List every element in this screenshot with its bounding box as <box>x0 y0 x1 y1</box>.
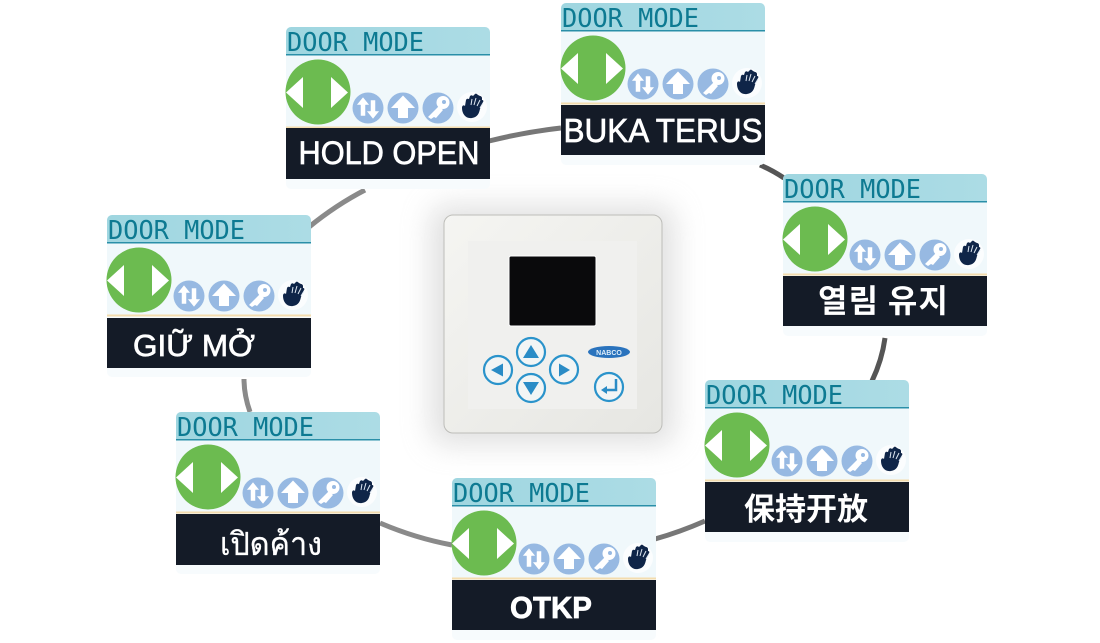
device shadow glow <box>430 205 675 445</box>
button: right <box>550 356 578 384</box>
button: up <box>517 338 545 366</box>
label bar <box>705 482 909 532</box>
card: OTKP <box>452 478 656 640</box>
header text: DOOR MODE <box>784 175 921 205</box>
card background <box>107 215 311 377</box>
header text: DOOR MODE <box>108 216 245 246</box>
card background <box>561 3 765 165</box>
mode icons <box>286 60 487 124</box>
logo: NABCO: NABCO <box>596 350 622 357</box>
button: left <box>484 356 512 384</box>
label: GIỮ MỞ <box>133 327 255 363</box>
card: HOLD OPEN <box>286 27 490 189</box>
label bar <box>783 276 987 326</box>
card background <box>783 174 987 336</box>
card background <box>452 478 656 640</box>
mode icons <box>176 444 377 510</box>
header text: DOOR MODE <box>453 479 590 509</box>
card: Korean label <box>782 174 987 336</box>
button: enter <box>595 373 623 401</box>
device inner plate <box>468 241 637 409</box>
mode icons <box>452 510 653 576</box>
card: Chinese label <box>704 380 909 542</box>
label bar <box>286 128 490 179</box>
label: HOLD OPEN <box>298 135 480 171</box>
button: down <box>517 374 545 402</box>
mode icons <box>782 206 984 272</box>
label: OTKP <box>510 590 592 625</box>
device screen <box>509 256 596 326</box>
header text: DOOR MODE <box>287 28 424 58</box>
mode icons <box>704 412 906 478</box>
header text: DOOR MODE <box>706 381 843 411</box>
label bar <box>107 318 311 368</box>
label bar <box>452 580 656 630</box>
mode icons <box>560 36 762 100</box>
card: BUKA TERUS <box>560 3 765 165</box>
card background <box>176 412 380 574</box>
card background <box>705 380 909 542</box>
label bar <box>176 514 380 565</box>
card background <box>286 27 490 189</box>
label: BUKA TERUS <box>564 112 762 149</box>
card: Thai label <box>176 412 380 574</box>
device outer frame <box>444 215 662 433</box>
label bar <box>561 105 765 155</box>
mode icons <box>106 248 308 312</box>
connecting ring <box>244 128 885 545</box>
control panel device <box>444 215 662 433</box>
label: 열림 유지 <box>818 276 948 322</box>
logo: NABCO <box>588 346 630 358</box>
header text: DOOR MODE <box>562 4 699 34</box>
label: เปิดค้าง <box>220 526 322 562</box>
card: Vietnamese label <box>106 215 311 377</box>
label: 保持开放 <box>744 484 868 529</box>
header text: DOOR MODE <box>177 413 314 443</box>
